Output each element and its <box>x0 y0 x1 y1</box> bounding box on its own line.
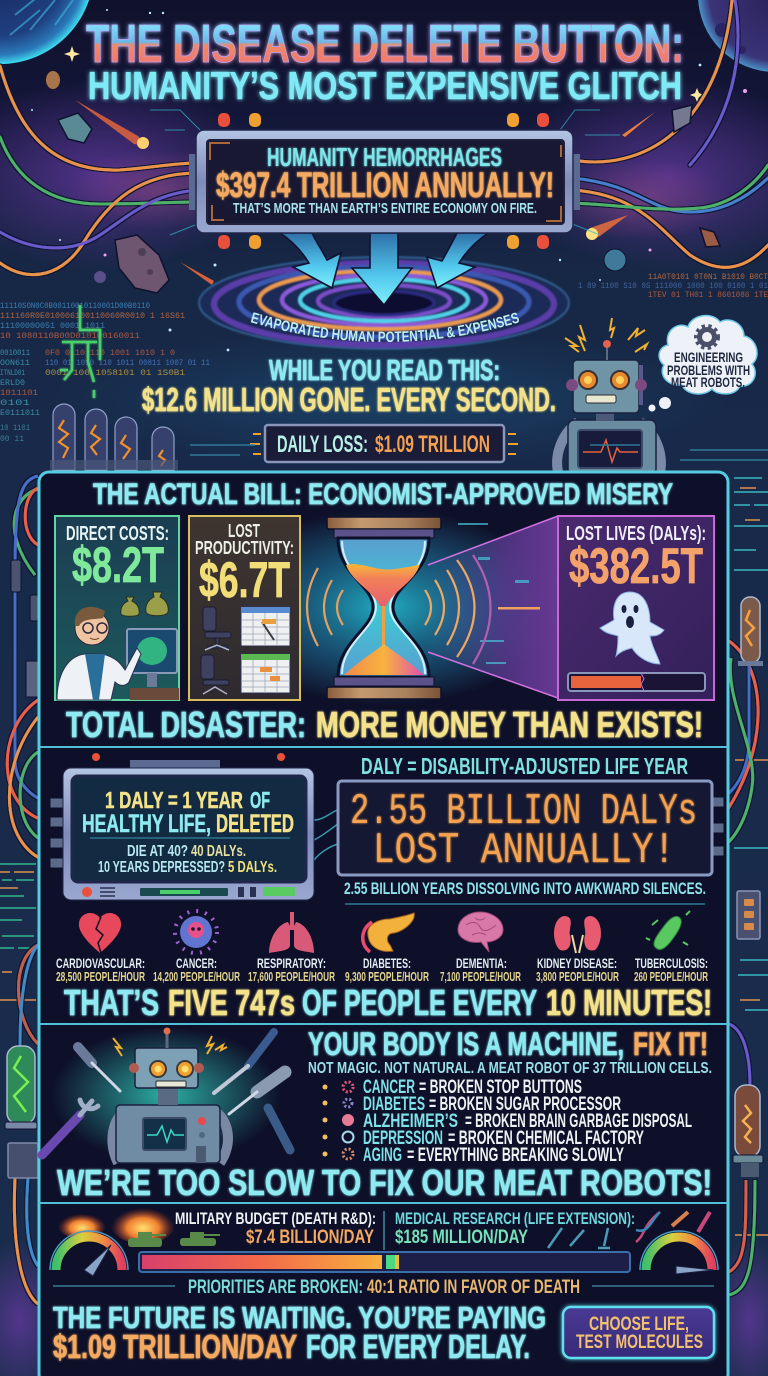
binary streams: 0010011 <box>0 349 30 358</box>
sound arcs <box>307 555 490 664</box>
binary streams: 0001 100 1058101 01 1S0B1 <box>45 369 185 378</box>
daily loss box: DAILY LOSS: <box>277 431 368 458</box>
headline: while you read this: $12.6 MILLION GONE. EVERY SECOND. <box>142 381 556 418</box>
monitor: daly definition: 5 DALYs. <box>228 859 277 876</box>
icon: ghost <box>600 592 664 664</box>
labels: disease: DEMENTIA: <box>456 955 507 971</box>
label: military budget: MILITARY BUDGET (DEATH R&D): <box>175 1209 376 1228</box>
icon: spreadsheets <box>241 607 290 693</box>
values: people per hour: 9,300 PEOPLE/HOUR <box>345 969 429 984</box>
icon: bacterium <box>646 911 690 950</box>
binary streams: 0F0 0110 110 1001 1010 1 0 <box>45 349 175 358</box>
caption on vortex: EVAPORATED HUMAN POTENTIAL & EXPENSES <box>250 312 519 342</box>
icon: broken heart <box>79 913 121 953</box>
card: lost productivity: $6.7T <box>199 552 290 608</box>
robot with tools <box>42 1027 290 1163</box>
monitor: daly definition: DIE AT 40? <box>127 843 188 860</box>
main panel <box>39 472 728 1376</box>
list: broken things: = BROKEN SUGAR PROCESSOR <box>429 1094 621 1115</box>
gauge: military <box>50 1231 128 1276</box>
arrows into vortex <box>280 233 488 305</box>
vortex <box>199 257 569 349</box>
sign: annual loss <box>189 113 580 249</box>
icon: kidneys <box>554 916 601 953</box>
monitor: daly definition <box>63 753 314 900</box>
binary streams: 11110SON0C0B00110010110001D00B0110 <box>0 302 150 311</box>
card: direct costs: DIRECT COSTS: <box>66 523 169 545</box>
list: broken things <box>322 1077 692 1166</box>
binary streams: 0101 <box>0 399 30 408</box>
binary streams: ITNLD01 <box>0 369 25 378</box>
values: people per hour: 7,100 PEOPLE/HOUR <box>440 969 521 984</box>
binary streams: 111160R0E010006100110060R0010 1 16S61 <box>0 312 185 321</box>
side: right cables and devices <box>714 597 763 1295</box>
list: broken things: = BROKEN CHEMICAL FACTORY <box>448 1128 644 1149</box>
labels: disease: CARDIOVASCULAR: <box>56 955 145 971</box>
binary streams: 10 1080110B00D010100160011 <box>0 332 140 341</box>
binary streams: 1110000O051 0001 1011 <box>0 322 105 331</box>
icon: virus <box>175 911 217 953</box>
label: medical research: $185 MILLION/DAY <box>395 1227 528 1248</box>
summary: five 747s: 10 MINUTES! <box>546 982 712 1023</box>
icon: green tube <box>5 1046 37 1129</box>
list: broken things: = BROKEN STOP BUTTONS <box>419 1077 582 1098</box>
cables: right <box>573 0 768 267</box>
binary streams: E0111011 <box>0 409 40 418</box>
binary streams: 00 11 <box>0 435 24 444</box>
monitor: daly definition: 40 DALYs. <box>191 843 246 860</box>
led board: dalys lost: LOST ANNUALLY! <box>373 826 675 876</box>
heading: body is a machine: YOUR BODY IS A MACHINE, <box>308 1026 624 1062</box>
caption: priorities: 40:1 RATIO IN FAVOR OF DEATH <box>367 1277 580 1298</box>
data dashes: side columns <box>0 445 768 1235</box>
values: people per hour: 17,600 PEOPLE/HOUR <box>248 969 335 984</box>
icon: empty chairs <box>201 607 231 694</box>
label: military budget <box>175 1209 376 1248</box>
call to action text: FOR EVERY DELAY. <box>306 1328 530 1365</box>
labels: disease: RESPIRATORY: <box>257 955 326 971</box>
icon: doctor at monitor <box>57 607 179 700</box>
binary streams: 1011101 <box>0 389 38 398</box>
robot: top right <box>557 318 661 475</box>
binary streams: 110 01 1010 110 1011 00811 1007 01 11 <box>45 359 210 368</box>
hourglass <box>327 517 441 699</box>
thought bubble <box>648 316 757 412</box>
call to action text <box>53 1300 546 1365</box>
bar: spending comparison <box>139 1252 630 1272</box>
led board: dalys lost <box>338 781 712 876</box>
labels: disease: DIABETES: <box>363 955 411 971</box>
monitor: daly definition: DELETED <box>216 810 294 838</box>
headline: while you read this: WHILE YOU READ THIS: <box>269 355 500 387</box>
summary: total disaster: TOTAL DISASTER: <box>66 704 306 745</box>
icon: upper tube <box>738 597 763 666</box>
binary streams <box>0 273 768 444</box>
icons: microscopes and dna <box>548 1212 710 1248</box>
icon: lower tube <box>733 1085 763 1177</box>
circuit: green glitch <box>60 305 100 398</box>
icon: outlet <box>737 891 760 939</box>
daily loss box: $1.09 TRILLION <box>375 431 490 458</box>
card: direct costs: $8.2T <box>72 537 164 593</box>
summary: five 747s: OF PEOPLE EVERY <box>302 982 537 1023</box>
card: lost productivity <box>189 516 300 700</box>
labels: disease <box>56 955 708 971</box>
binary streams: ERLD0 <box>0 379 25 388</box>
card: lost lives: $382.5T <box>569 538 703 594</box>
planet: upper right <box>698 0 768 72</box>
label: medical research: MEDICAL RESEARCH (LIFE EXTENSION): <box>395 1209 635 1228</box>
list: broken things: ALZHEIMER’S <box>363 1111 458 1132</box>
icon: money bags <box>121 592 168 616</box>
section: priorities <box>50 1204 718 1365</box>
call to action text: THE FUTURE IS WAITING. YOU’RE PAYING <box>53 1300 546 1335</box>
labels: disease: TUBERCULOSIS: <box>635 955 708 971</box>
connectors and cables near displays <box>50 797 724 868</box>
list: broken things: AGING <box>363 1145 402 1166</box>
labels: disease: CANCER: <box>176 955 217 971</box>
monitor: daly definition: 1 DALY = 1 YEAR <box>105 787 243 813</box>
title <box>86 14 684 108</box>
values: people per hour: 3,800 PEOPLE/HOUR <box>536 969 619 984</box>
list: broken things: DIABETES <box>363 1094 425 1115</box>
asteroids and meteors <box>46 71 720 293</box>
icons: explosions and tanks <box>58 1204 220 1247</box>
caption: priorities: PRIORITIES ARE BROKEN: <box>188 1277 363 1298</box>
card: lost lives: LOST LIVES (DALYs): <box>566 523 706 545</box>
summary: five 747s <box>64 982 712 1023</box>
values: people per hour: 14,200 PEOPLE/HOUR <box>153 969 240 984</box>
section: daly <box>50 753 724 1023</box>
heading: body is a machine: FIX IT! <box>633 1026 708 1062</box>
cables: left <box>0 66 196 275</box>
call to action text: $1.09 TRILLION/DAY <box>53 1328 297 1365</box>
icon: lungs <box>269 912 314 953</box>
button: choose life: TEST MOLECULES <box>576 1332 703 1353</box>
card: lost lives <box>558 516 714 700</box>
disease row <box>56 911 708 984</box>
card: direct costs <box>55 516 179 700</box>
button: choose life: CHOOSE LIFE, <box>589 1314 689 1335</box>
monitor: daly definition: HEALTHY LIFE, <box>82 810 211 838</box>
section: body is a machine <box>42 1026 712 1203</box>
button: choose life <box>563 1307 714 1358</box>
card: lost productivity: LOST <box>228 521 260 541</box>
list: broken things: = EVERYTHING BREAKING SLOWLY <box>407 1145 624 1166</box>
label: medical research <box>395 1209 635 1248</box>
summary: five 747s: THAT’S <box>64 982 159 1023</box>
gauge: medical <box>640 1231 718 1274</box>
sign: annual loss: HUMANITY HEMORRHAGES <box>267 142 502 172</box>
binary streams: 10 1101 <box>0 424 30 433</box>
section: actual bill <box>55 478 714 745</box>
progress bar: life bar <box>568 673 705 691</box>
summary: five 747s: FIVE 747s <box>168 982 295 1023</box>
values: people per hour <box>56 969 708 984</box>
label: military budget: $7.4 BILLION/DAY <box>246 1227 374 1248</box>
circuit traces behind sign <box>150 110 620 235</box>
labels: disease: KIDNEY DISEASE: <box>537 955 617 971</box>
card: lost productivity: PRODUCTIVITY: <box>195 538 294 558</box>
sign: annual loss: $397.4 TRILLION ANNUALLY! <box>216 166 554 205</box>
list: broken things: DEPRESSION <box>363 1128 443 1149</box>
monitor: daly definition: 10 YEARS DEPRESSED? <box>98 859 225 876</box>
binary streams: OON611 <box>0 359 30 368</box>
monitor: daly definition: OF <box>250 787 270 813</box>
planet: upper left <box>0 0 94 64</box>
values: people per hour: 28,500 PEOPLE/HOUR <box>56 969 145 984</box>
list: broken things: CANCER <box>363 1077 415 1098</box>
summary: total disaster <box>66 704 703 745</box>
glow behind hourglass <box>213 509 557 705</box>
caption: priorities <box>53 1277 714 1298</box>
beam: cone to lost lives <box>428 516 558 698</box>
sign: annual loss: THAT’S MORE THAN EARTH’S ENTIRE ECONOMY ON FIRE. <box>233 200 537 217</box>
icon: brain <box>458 912 503 952</box>
values: people per hour: 260 PEOPLE/HOUR <box>634 969 708 984</box>
nixie tubes <box>50 404 178 470</box>
icon: pancreas <box>363 913 414 952</box>
side: left cables and devices <box>5 476 52 1304</box>
daily loss box <box>250 425 518 462</box>
headline: while you read this <box>142 355 556 418</box>
